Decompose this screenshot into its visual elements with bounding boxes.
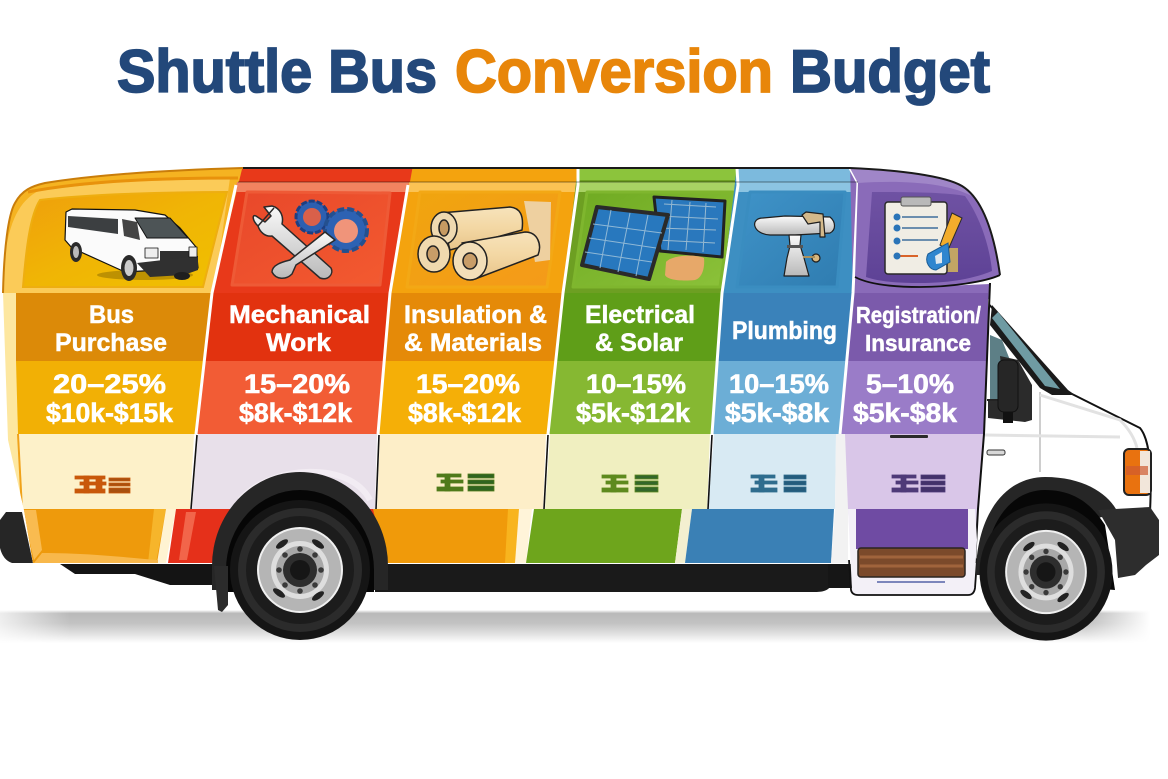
van body <box>0 165 1010 570</box>
labels: mechanical work <box>229 301 370 428</box>
door handle <box>987 450 1005 455</box>
title: Budget <box>790 38 990 105</box>
panel: mechanical work <box>168 165 415 563</box>
front wheel arch <box>976 477 1118 575</box>
labels: electrical and solar: 10–15% <box>586 369 686 399</box>
purple door step <box>848 435 977 595</box>
title <box>117 38 990 105</box>
panel: plumbing <box>685 165 857 563</box>
labels: registration and insurance: 5–10% <box>866 369 954 399</box>
small emblem: yellow <box>75 476 130 493</box>
rear wheel arch <box>212 472 388 590</box>
labels: electrical and solar <box>576 301 695 428</box>
labels: electrical and solar: Electrical <box>585 301 695 329</box>
mud flap <box>214 566 228 612</box>
icon: side mirror <box>998 360 1018 423</box>
labels: registration and insurance: $5k-$8k <box>853 398 958 428</box>
labels: plumbing <box>725 317 837 428</box>
ground shadow <box>0 610 1168 643</box>
icon: wrenches and gears <box>253 201 367 279</box>
rear bumper <box>0 512 33 563</box>
labels: insulation and materials: 15–20% <box>416 369 520 399</box>
labels: mechanical work: Work <box>266 329 331 357</box>
labels: registration and insurance: Insurance <box>865 330 971 356</box>
labels: registration and insurance <box>853 302 982 428</box>
icon: clipboard <box>885 197 962 274</box>
panel: bus purchase <box>0 165 245 563</box>
labels: plumbing: 10–15% <box>729 369 829 399</box>
purple roof cap <box>850 168 1000 287</box>
wood step panel <box>858 548 965 577</box>
icon: insulation rolls <box>418 201 551 280</box>
labels: insulation and materials: Insulation & <box>404 301 547 329</box>
title: Conversion <box>455 38 773 105</box>
labels: bus purchase: $10k-$15k <box>46 398 174 428</box>
icon: turn signal <box>1124 449 1151 495</box>
panel: insulation and materials <box>373 165 580 563</box>
small emblem: purple <box>892 475 945 492</box>
body outline <box>3 168 1000 563</box>
labels: plumbing: $5k-$8k <box>725 398 830 428</box>
labels: bus purchase: 20–25% <box>53 369 166 399</box>
labels: plumbing: Plumbing <box>732 317 837 345</box>
labels: mechanical work: 15–20% <box>244 369 350 399</box>
icon: plumbing faucet <box>755 212 834 276</box>
icon: solar panels <box>582 197 725 280</box>
labels: electrical and solar: & Solar <box>595 329 683 357</box>
separators <box>196 168 858 434</box>
icon: white van <box>65 209 198 281</box>
front wheel <box>980 503 1112 641</box>
rear chassis <box>60 564 215 585</box>
title: Shuttle Bus <box>117 38 437 105</box>
labels: bus purchase: Purchase <box>55 329 167 357</box>
labels: insulation and materials <box>404 301 547 428</box>
labels: mechanical work: $8k-$12k <box>239 398 353 428</box>
labels: bus purchase <box>46 301 174 428</box>
small emblem: blue <box>751 475 806 492</box>
front bumper <box>1098 507 1159 578</box>
labels: electrical and solar: $5k-$12k <box>576 398 691 428</box>
panel: electrical and solar <box>526 165 737 563</box>
rear wheel <box>230 500 370 640</box>
van cab <box>975 300 1151 560</box>
side sill <box>375 564 832 592</box>
small emblem: orange <box>437 474 494 491</box>
icon panel <box>23 192 227 287</box>
labels: registration and insurance: Registration/ <box>856 302 982 328</box>
small emblem: green <box>602 475 658 492</box>
labels: insulation and materials: $8k-$12k <box>408 398 522 428</box>
labels: mechanical work: Mechanical <box>229 301 370 329</box>
labels: bus purchase: Bus <box>89 301 134 329</box>
panel: registration and insurance <box>842 172 989 525</box>
labels: insulation and materials: & Materials <box>404 329 542 357</box>
